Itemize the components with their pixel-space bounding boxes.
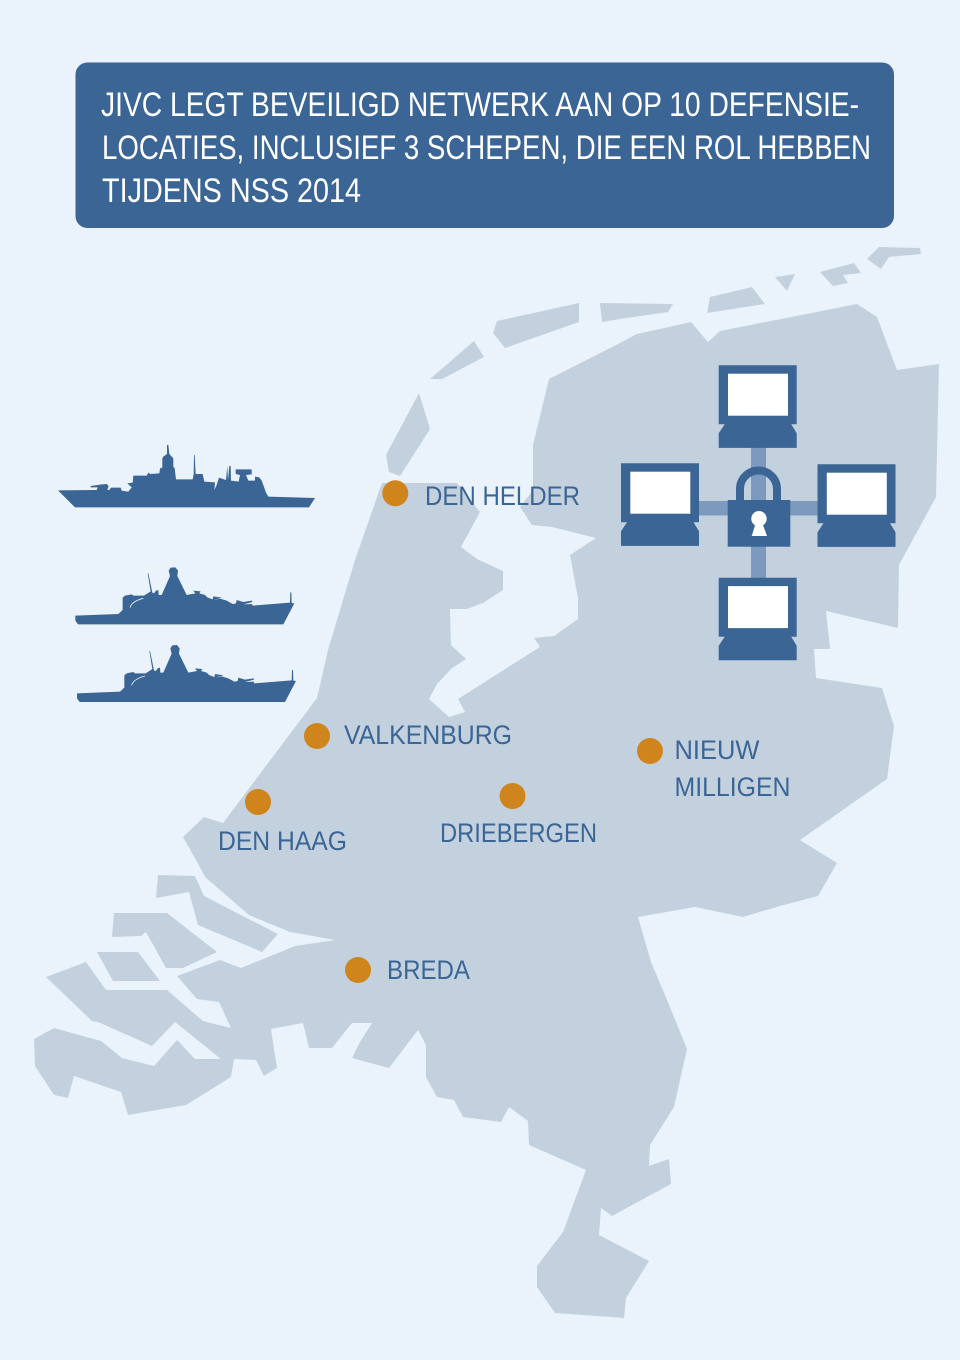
location: Driebergen [440,783,597,848]
location: Den Haag [218,789,347,856]
title background [76,62,894,228]
location: Nieuw Milligen [637,735,790,802]
network connectors [695,440,820,585]
Goeree island [156,875,278,952]
ship silhouettes [58,445,315,702]
Juist island [867,247,921,269]
location: Valkenburg: VALKENBURG [344,720,512,750]
location: Den Haag: DEN HAAG [218,826,347,856]
Vlieland island [430,341,484,379]
map of the Netherlands [34,247,939,1318]
location: Breda: BREDA [387,955,470,985]
laptop right [818,464,896,547]
Rottumeroog island [775,274,795,291]
Terschelling island [493,303,579,348]
landing ship one [75,567,294,624]
secure network diagram [621,365,896,660]
laptop top [719,365,797,448]
Schiermonnikoog island [707,287,765,313]
landing ship two [77,645,296,702]
location: Breda [345,955,470,985]
title line 3: TIJDENS NSS 2014 [102,172,361,210]
Schouwen island [112,913,217,968]
padlock icon [728,470,790,547]
Borkum island [820,263,861,286]
laptop bottom [719,578,797,660]
laptop left [621,463,699,546]
location: Driebergen: DRIEBERGEN [440,818,597,848]
Texel island [386,393,430,476]
Ameland island [600,303,673,322]
mainland [34,304,939,1318]
location: Den Helder: DEN HELDER [425,481,580,511]
Noord-Beveland island [97,952,160,981]
location: Nieuw Milligen: NIEUW [674,735,760,765]
location: Nieuw Milligen: MILLIGEN [674,772,790,802]
title panel [76,62,894,228]
frigate [58,445,315,507]
